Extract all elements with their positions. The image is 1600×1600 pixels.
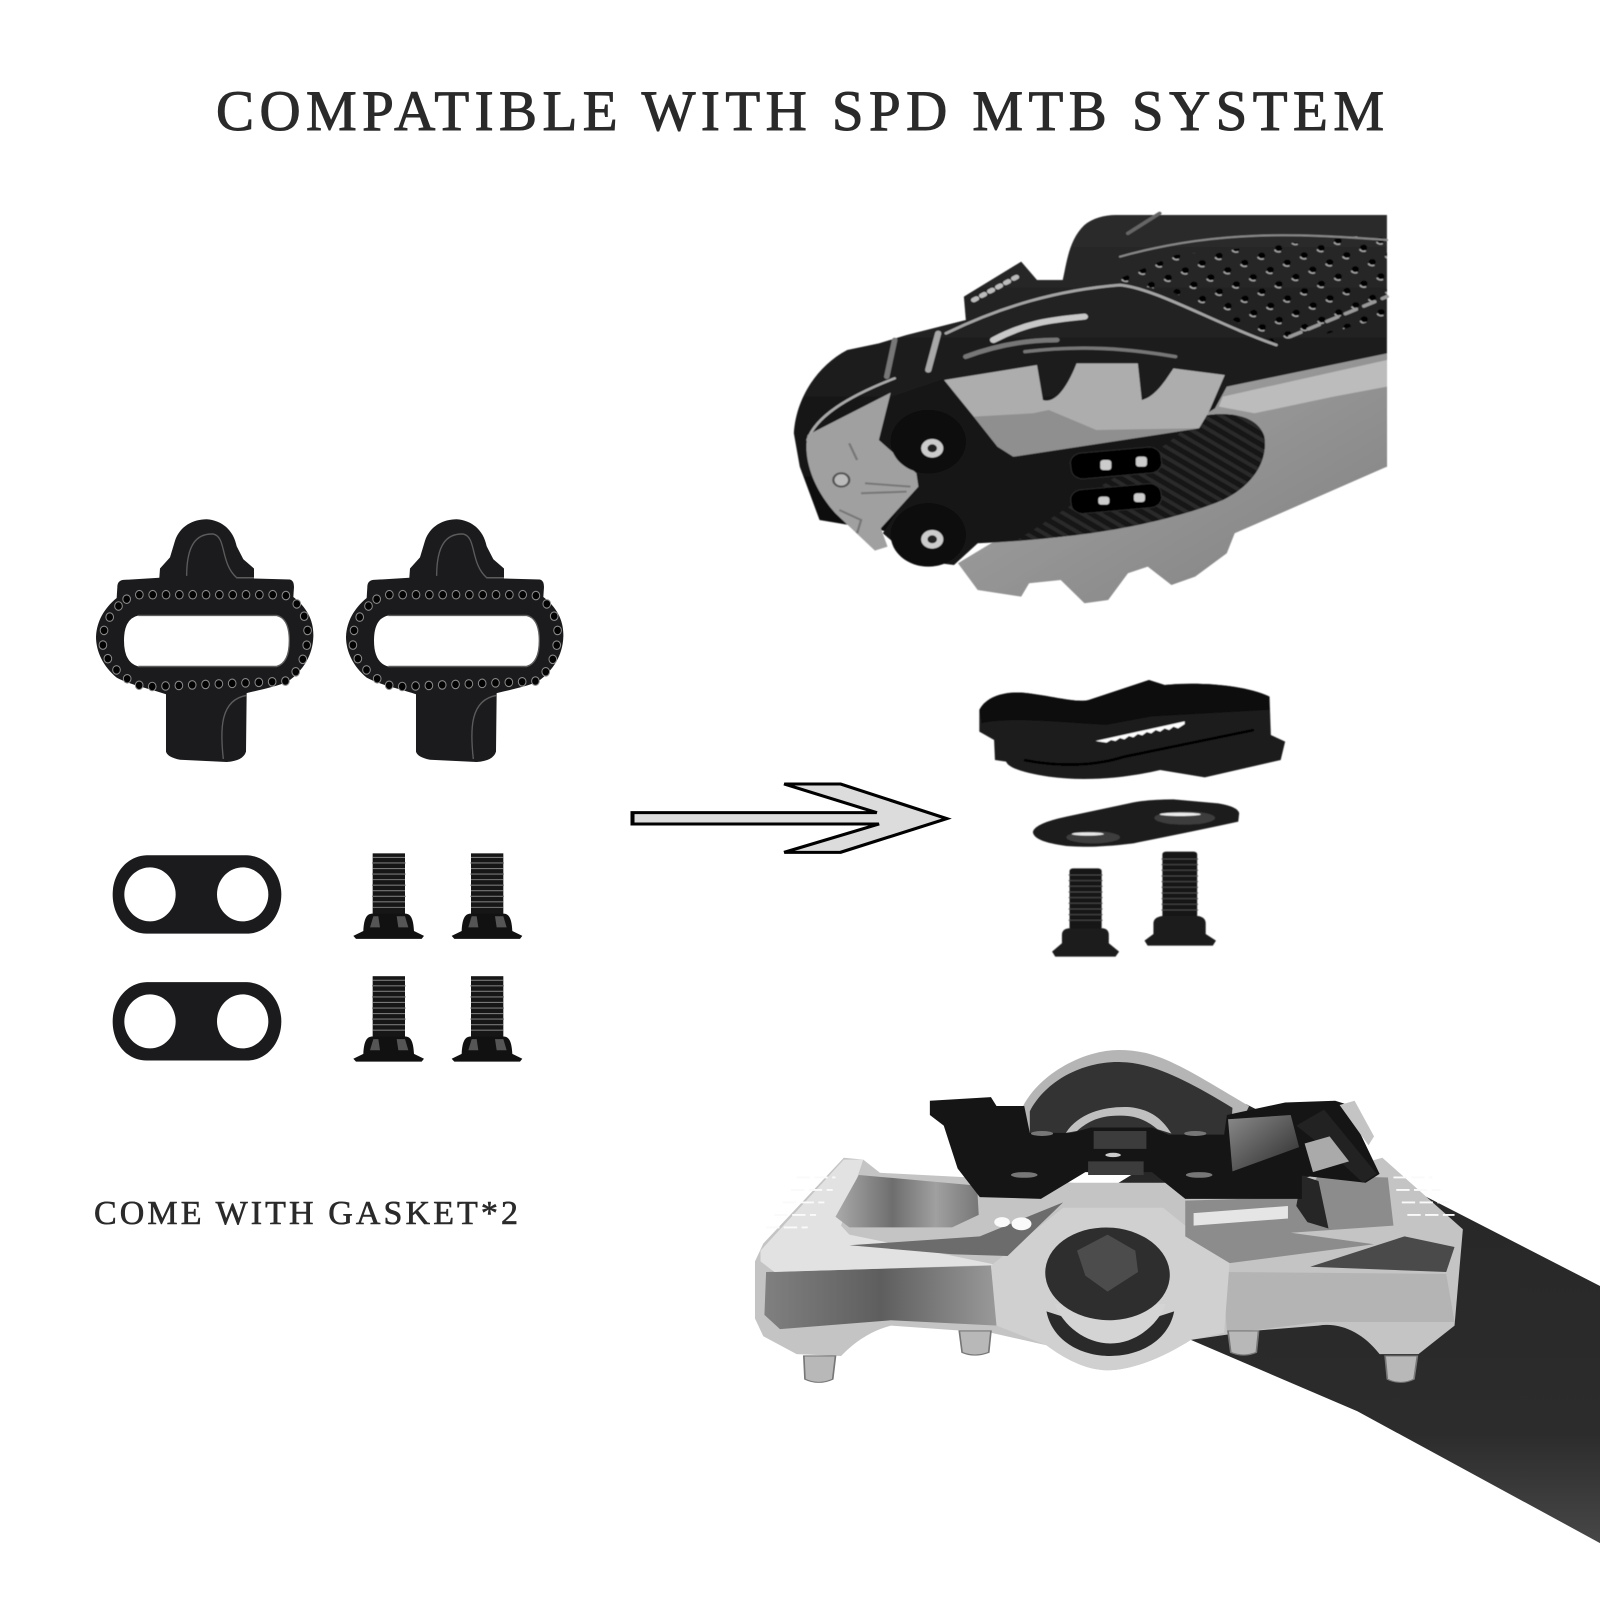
centre bridge: [1088, 1131, 1146, 1175]
cleat right: [346, 519, 563, 762]
caption: COME WITH GASKET*2: [94, 1195, 518, 1232]
right face: [1223, 1272, 1455, 1333]
wing chevrons: [766, 1177, 1455, 1227]
right cube: [1228, 1115, 1299, 1171]
cleat top band: [979, 680, 1270, 725]
axle highlight: [1066, 1107, 1171, 1134]
toe stud: [833, 473, 849, 487]
left slit: [849, 1202, 1063, 1256]
blade: [1296, 1176, 1329, 1228]
screw 4: [452, 976, 522, 1062]
lug shading: [974, 410, 1199, 457]
perforations: [1120, 236, 1388, 342]
slot bolts: [1098, 457, 1147, 505]
bolt recess: [1039, 1224, 1176, 1356]
front spike bolts: [891, 410, 966, 567]
title: COMPATIBLE WITH SPD MTB SYSTEM: [216, 80, 1384, 143]
left window: [835, 1175, 979, 1227]
cleat left: [96, 519, 313, 762]
gasket upper: [113, 855, 281, 934]
cleat slot: [1024, 730, 1254, 765]
screw left: [1052, 868, 1119, 957]
crank arm: [1119, 1104, 1600, 1543]
gasket lower: [113, 982, 281, 1061]
cleat: [979, 680, 1285, 779]
carbon weave: [1017, 414, 1265, 540]
outer sole: [958, 353, 1387, 603]
cleat teeth: [1095, 721, 1185, 743]
pedal body: [755, 1158, 1463, 1370]
latch shine: [1305, 1136, 1349, 1172]
toe chevrons: [839, 443, 910, 533]
carbon plate: [879, 378, 1265, 565]
toe bumper: [806, 393, 918, 551]
shim: [1033, 799, 1239, 847]
shim holes: [1066, 811, 1215, 843]
exploded cleat assembly: [979, 680, 1285, 957]
crank boss inner: [1030, 1062, 1232, 1147]
latch: [1296, 1110, 1377, 1183]
clip mechanism: [930, 1097, 1380, 1199]
mechanism screws: [1011, 1131, 1212, 1178]
forefoot lugs: [944, 363, 1225, 457]
left face: [764, 1266, 998, 1329]
arrow: [632, 784, 947, 852]
shoe upper: [794, 215, 1387, 533]
cleat slots: [1069, 446, 1163, 515]
right window: [1185, 1176, 1393, 1263]
photo: cycling shoe sole: [794, 213, 1389, 603]
left shine: [994, 1217, 1031, 1230]
pedal pins: [804, 1331, 1417, 1382]
photo: two black cleats: [96, 519, 563, 1062]
silver lever: [1340, 1101, 1374, 1145]
upper highlights: [808, 213, 1387, 440]
right dark patch: [1310, 1236, 1455, 1272]
screw 3: [353, 976, 424, 1062]
screw right: [1145, 852, 1216, 946]
right window shine: [1194, 1206, 1288, 1226]
top left bright: [761, 1160, 996, 1272]
centre bright: [991, 1208, 1230, 1370]
screw 1: [353, 853, 424, 939]
screw 2: [452, 853, 522, 939]
photo: pedal on crank arm: [755, 1050, 1600, 1543]
crank boss rim: [1023, 1050, 1249, 1147]
heel-side lug highlight: [1219, 360, 1387, 413]
